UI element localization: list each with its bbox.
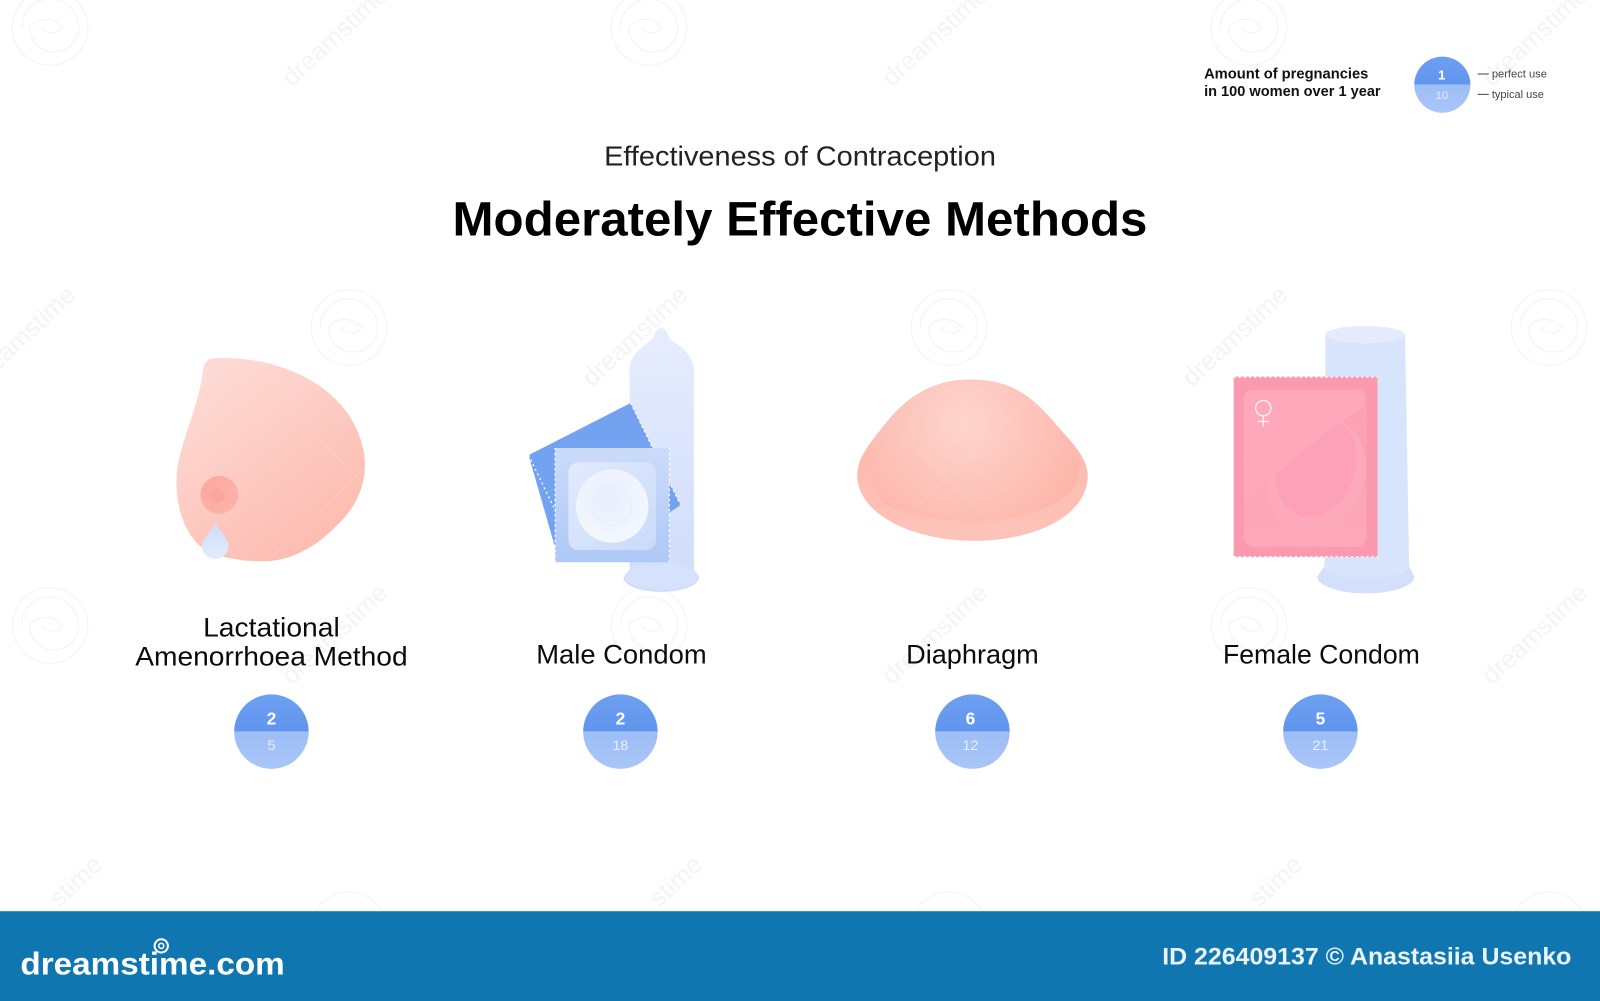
rate circle: 5 perfect, 21 typical: 21 <box>1312 738 1328 754</box>
icon: female symbol <box>1256 401 1271 427</box>
watermark pattern: stime <box>644 850 708 913</box>
legend circle: 10 <box>1436 90 1448 102</box>
legend <box>1204 57 1547 113</box>
watermark pattern: dreamstime <box>1177 281 1293 392</box>
subtitle: Effectiveness of Contraception <box>604 140 996 171</box>
watermark pattern: stime <box>44 850 108 913</box>
icon: breast with milk drop <box>176 358 365 561</box>
rate circle: 5 perfect, 21 typical <box>1283 694 1358 769</box>
rate circle: 2 perfect, 5 typical: 2 <box>267 708 276 728</box>
rate circle: 2 perfect, 18 typical <box>583 694 658 769</box>
label: lactational amenorrhoea method <box>135 613 408 671</box>
icon: condom and packets <box>529 328 699 592</box>
legend key: perfect use <box>1492 69 1547 81</box>
legend key <box>1478 69 1547 101</box>
footer bar <box>0 911 1600 1001</box>
legend circle <box>1414 57 1470 113</box>
legend heading: in 100 women over 1 year <box>1204 84 1381 100</box>
label: female condom: Female Condom <box>1223 639 1420 669</box>
watermark pattern: dreamstime <box>277 579 393 690</box>
label: lactational amenorrhoea method: Lactational <box>203 613 340 643</box>
panel: lactational amenorrhoea method <box>135 358 408 769</box>
footer credit: ID 226409137 © Anastasiia Usenko <box>1162 943 1571 970</box>
legend heading: Amount of pregnancies <box>1204 67 1368 83</box>
watermark pattern: dreamstime <box>877 579 993 690</box>
rate circle: 6 perfect, 12 typical <box>935 694 1010 769</box>
icon: female condom and packet <box>1234 326 1414 593</box>
rate circle: 2 perfect, 18 typical: 2 <box>616 708 625 728</box>
watermark pattern: stime <box>1244 850 1308 913</box>
legend key: typical use <box>1492 89 1544 101</box>
label: male condom: Male Condom <box>536 639 707 669</box>
rate circle: 6 perfect, 12 typical: 12 <box>962 738 978 754</box>
rate circle: 5 perfect, 21 typical: 5 <box>1316 708 1326 728</box>
panel: male condom <box>529 328 707 769</box>
icon: diaphragm dome <box>857 380 1088 541</box>
label: lactational amenorrhoea method: Amenorrhoea Method <box>135 641 408 671</box>
legend heading <box>1204 67 1381 100</box>
label: diaphragm: Diaphragm <box>906 639 1039 669</box>
rate circle: 2 perfect, 5 typical: 5 <box>267 738 275 754</box>
panel: female condom <box>1223 326 1420 769</box>
title: Moderately Effective Methods <box>453 194 1147 247</box>
legend circle: 1 <box>1438 68 1446 83</box>
watermark pattern: dreamstime <box>1477 579 1593 690</box>
rate circle: 2 perfect, 18 typical: 18 <box>612 738 628 754</box>
rate circle: 2 perfect, 5 typical <box>234 694 309 769</box>
rate circle: 6 perfect, 12 typical: 6 <box>966 708 976 728</box>
footer logo: dreamstime.com <box>20 945 285 981</box>
watermark pattern: dreamstime <box>577 281 693 392</box>
panel: diaphragm <box>857 380 1088 769</box>
